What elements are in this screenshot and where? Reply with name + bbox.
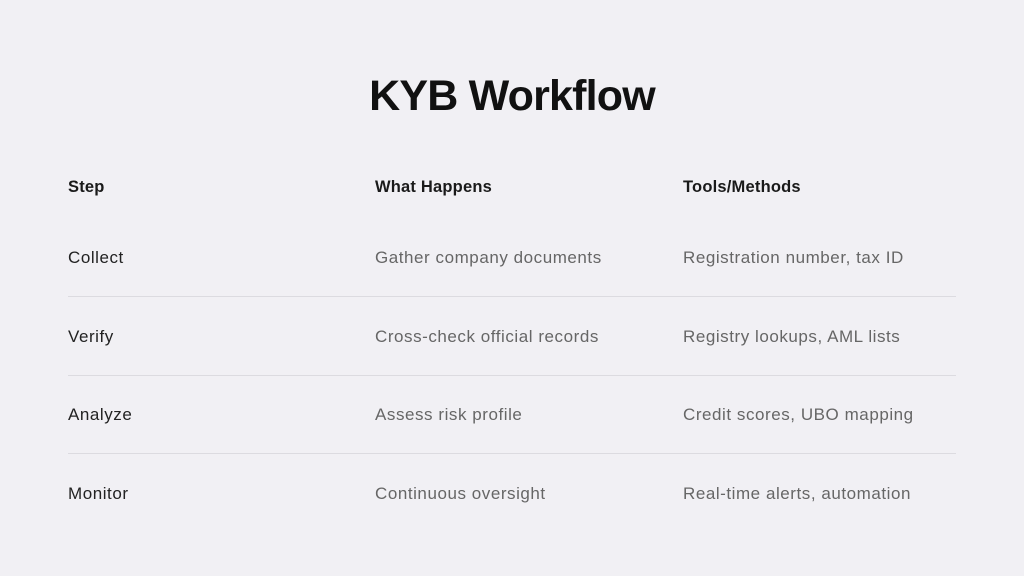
row: collect: Collect xyxy=(68,248,124,267)
row: verify: Cross-check official records xyxy=(375,327,599,346)
row: analyze: Credit scores, UBO mapping xyxy=(683,405,914,424)
header row: Step xyxy=(68,178,105,196)
row: collect xyxy=(68,248,904,267)
row: monitor: Real-time alerts, automation xyxy=(683,484,911,503)
row: analyze: Assess risk profile xyxy=(375,405,522,424)
row: verify: Registry lookups, AML lists xyxy=(683,327,900,346)
title: KYB Workflow xyxy=(369,72,655,120)
header row: Tools/Methods xyxy=(683,178,801,196)
row: monitor xyxy=(68,484,911,503)
row: analyze xyxy=(68,405,914,424)
row: verify: Verify xyxy=(68,327,114,346)
row: verify xyxy=(68,327,900,346)
header row xyxy=(68,178,801,196)
row: monitor: Monitor xyxy=(68,484,129,503)
row: collect: Gather company documents xyxy=(375,248,602,267)
row: collect: Registration number, tax ID xyxy=(683,248,904,267)
header row: What Happens xyxy=(375,178,492,196)
row: monitor: Continuous oversight xyxy=(375,484,546,503)
row: analyze: Analyze xyxy=(68,405,132,424)
